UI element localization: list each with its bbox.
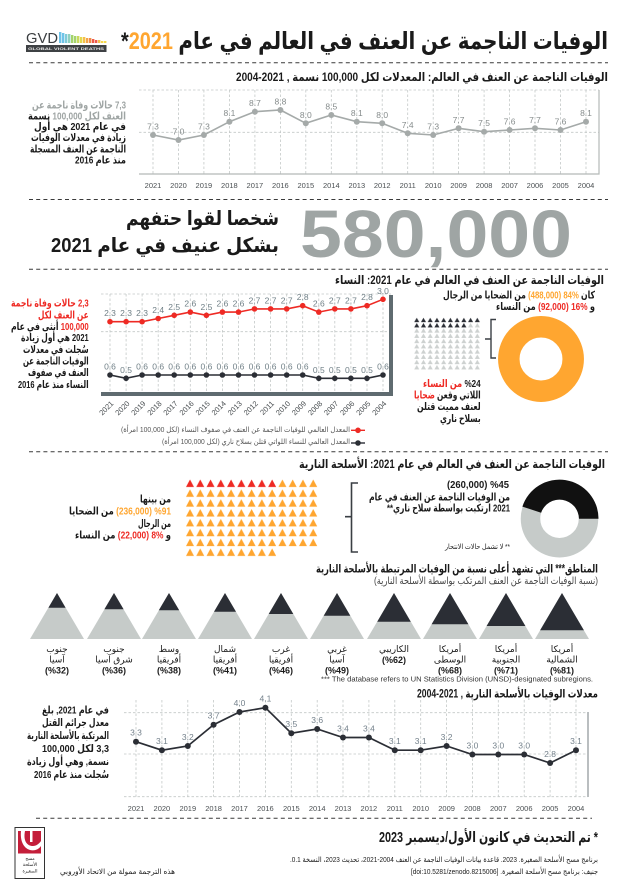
text block: female rate note: 2021 هي أول زيادة (21, 330, 89, 344)
line chart: female rates: 0.5 (345, 365, 357, 375)
text block: global rate note: العنف لكل 100,000 نسمة (28, 110, 126, 122)
logo: Small Arms Survey: الصغيرة (23, 868, 37, 874)
line chart: female rates: 0.6 (184, 362, 196, 372)
text block: global rate note (28, 100, 126, 166)
line chart: female rates: 0.6 (281, 362, 293, 372)
labels: regions: جنوب (46, 644, 68, 654)
source text: برنامج مسح الأسلحة الصغيرة. 2023. قاعدة بيانات الوفيات الناجمة عن العنف 2004-2021، تحديث 2023، النسخة 0.1. (290, 854, 598, 864)
text block: female firearm share: اللاتي وقعن ضحايا (414, 390, 481, 402)
text block: female rate note (11, 298, 89, 391)
line chart: female rates: 0.6 (152, 362, 164, 372)
line chart: female rates: 2.6 (313, 299, 325, 309)
line chart: female rates: 3.0 (377, 286, 389, 296)
line chart: firearm rates: 4.1 (259, 694, 272, 704)
line chart: female rates: 0.6 (136, 362, 148, 372)
line chart: global violent death rate (139, 90, 599, 190)
line chart: global violent death rate: 2013 (348, 181, 365, 190)
labels: regions: (%41) (213, 666, 237, 676)
text block: male and female victim share: كان %84 (488,000) من الضحايا من الرجال (443, 290, 596, 302)
text block: female rate note: سُجلت في معدلات (23, 344, 89, 356)
text block: firearm rate note: 3,3 لكل 100,000 (42, 743, 109, 755)
line chart: firearm rates: 3.1 (389, 736, 401, 746)
labels: regions: آسيا (49, 654, 65, 664)
line chart: firearm rates: 3.5 (285, 719, 297, 729)
text block: female firearm share (414, 378, 481, 425)
line chart: firearm rates: 3.4 (337, 724, 349, 734)
line chart: firearm rates: 2020 (154, 804, 170, 813)
line chart: firearm rates: 3.1 (570, 736, 582, 746)
line chart: female rates: 2018 (145, 399, 164, 417)
source text: جنيف: برنامج مسح الأسلحة الصغيرة. [doi:10.5281/zenodo.8215006] (411, 866, 598, 876)
line chart: female rates: 2.6 (216, 299, 229, 309)
labels: regions: الكاريبي (379, 644, 409, 654)
line chart: female rates: 2014 (210, 399, 228, 417)
line chart: female rates: 2017 (161, 399, 180, 417)
labels: regions: (%49) (325, 666, 349, 676)
line chart: firearm rates: 2010 (412, 804, 429, 813)
line chart: firearm rates: 2005 (542, 804, 558, 813)
line chart: firearm rates: 3.0 (466, 740, 479, 750)
line chart: firearm rates: 2018 (205, 804, 222, 813)
text block: firearm share (369, 479, 510, 514)
labels: regions: غرب (272, 644, 290, 654)
big number: 580,000: 580,000 (300, 197, 572, 272)
line chart: global violent death rate: 7.3 (427, 122, 439, 132)
text block: global rate note: زيادة في معدلات الوفيات (31, 132, 126, 144)
line chart: female rates: 2006 (338, 399, 356, 417)
text block: female rate note: عن العنف لكل (38, 310, 89, 322)
line chart: global violent death rate: 2007 (501, 181, 518, 190)
text block: male and female victim share (443, 290, 596, 313)
line chart: female rates (97, 286, 391, 417)
line chart: female rates: 2.7 (265, 295, 277, 305)
labels: regions: غربي (327, 644, 347, 654)
line chart: global violent death rate: 2014 (323, 181, 340, 190)
line chart: female rates: 0.6 (216, 362, 229, 372)
line chart: female rates: 2.8 (361, 292, 373, 302)
labels: regions: (%36) (102, 666, 126, 676)
line chart: female rates: 2020 (113, 399, 132, 417)
line chart: global violent death rate: 8.1 (580, 108, 592, 118)
labels: regions: (%68) (438, 666, 462, 676)
line chart: firearm rates: 3.6 (311, 715, 323, 725)
line chart: female rates: 2004 (370, 399, 388, 417)
legend: female rates (121, 424, 365, 446)
line chart: global violent death rate: 8.1 (223, 108, 236, 118)
line chart: female rates: 2012 (242, 399, 260, 417)
donut chart: firearm share (522, 480, 599, 548)
line chart: global violent death rate: 2009 (450, 181, 467, 190)
line chart: firearm rates: 2009 (438, 804, 455, 813)
bracket: firearms (345, 483, 358, 552)
logo: GVD Global Violent Deaths: GLOBAL VIOLENT DEATHS (28, 46, 104, 51)
line chart: female rates: 2010 (274, 399, 292, 417)
legend: female rates: المعدل العالمي للنساء اللواتي قتلن بسلاح ناري (لكل 100,000 امرأة) (162, 436, 350, 446)
line chart: female rates: 2019 (129, 399, 148, 417)
labels: regions: (%81) (550, 666, 574, 676)
labels: regions: أمريكا (551, 643, 573, 654)
line chart: global violent death rate: 8.5 (325, 102, 337, 112)
line chart: global violent death rate: 7.6 (504, 116, 516, 126)
line chart: firearm rates: 2006 (516, 804, 533, 813)
line chart: female rates: 2.6 (184, 299, 196, 309)
line chart: global violent death rate: 2020 (170, 181, 187, 190)
line chart: female rates: 0.5 (120, 365, 132, 375)
line chart: female rates: 0.5 (361, 365, 373, 375)
line chart: global violent death rate: 2008 (476, 181, 492, 190)
line chart: firearm rates: 3.0 (518, 740, 530, 750)
line chart: global violent death rate: 8.8 (274, 96, 287, 106)
line chart: global violent death rate: 7.7 (453, 115, 465, 125)
line chart: global violent death rate: 7.5 (478, 118, 490, 128)
source text (290, 854, 598, 876)
line chart: global violent death rate: 2005 (552, 181, 569, 190)
labels: regions: أمريكا (439, 643, 461, 654)
line chart: global violent death rate: 2004 (578, 181, 594, 190)
text block: female firearm share: لعنف مميت قتلن (417, 401, 481, 413)
line chart: female rates: 2016 (178, 399, 196, 417)
line chart: female rates: 2.7 (281, 295, 293, 305)
line chart: global violent death rate: 7.0 (173, 126, 185, 136)
labels: regions: الشمالية (546, 654, 578, 664)
line chart: female rates: 2013 (226, 399, 244, 417)
donut chart: male and female victims (509, 327, 573, 391)
line chart: global violent death rate: 2021 (145, 181, 161, 190)
pictogram: women killed with firearms (413, 317, 481, 370)
logo: Small Arms Survey: مسح (25, 856, 35, 861)
line chart: firearm rates: 2015 (283, 804, 300, 813)
logo: GVD Global Violent Deaths (26, 30, 106, 52)
logo: Small Arms Survey: الأسلحة (23, 861, 37, 867)
text block: firearm share: من الوفيات الناجمة عن العنف في عام (369, 492, 510, 504)
labels: regions: آسيا (329, 654, 345, 664)
line chart: female rates: 2.7 (345, 295, 357, 305)
text block: firearm rate note: سُجلت منذ عام 2016 (34, 769, 109, 781)
line chart: global violent death rate: 7.3 (147, 122, 159, 132)
text block: female rate note: 100,000 أنثى في عام (11, 319, 89, 333)
text block: female rate note: 2,3 حالات وفاة ناجمة (11, 298, 89, 310)
labels: regions: (%71) (494, 666, 518, 676)
labels: regions: (%32) (45, 666, 69, 676)
line chart: global violent death rate: 2010 (425, 181, 442, 190)
line chart: female rates: 2021 (97, 399, 115, 417)
text block: female firearm share: %24 من النساء (423, 378, 481, 390)
line chart: global violent death rate: 2017 (247, 181, 263, 190)
line chart: firearm rates: 2008 (464, 804, 481, 813)
labels: regions: الوسطى (434, 654, 466, 664)
line chart: global violent death rate: 8.7 (249, 98, 261, 108)
line chart: firearm rates: 3.0 (492, 740, 504, 750)
line chart: female rates: 2015 (194, 399, 212, 417)
bracket: women (485, 320, 496, 358)
legend: female rates: المعدل العالمي للوفيات الناجمة عن العنف في صفوف النساء (لكل 100,000 امرأة) (121, 424, 350, 434)
labels: regions: (%38) (157, 666, 181, 676)
line chart: female rates: 2.3 (136, 308, 148, 318)
line chart: female rates: 0.5 (329, 365, 341, 375)
line chart: firearm rates: 2004 (568, 804, 584, 813)
labels: regions: وسط (159, 644, 179, 654)
text block: firearm victims by sex: من بينها (140, 494, 171, 506)
labels: regions: شمال (214, 644, 236, 654)
logo: GVD Global Violent Deaths: GVD (26, 30, 58, 47)
text block: firearm victims by sex (69, 494, 171, 542)
logo: Small Arms Survey (15, 828, 44, 878)
line chart: female rates: 2011 (258, 399, 276, 417)
text block: female rate note: النساء منذ عام 2016 (18, 379, 89, 391)
labels: regions: أفريقيا (213, 654, 237, 664)
footnote: UNSD subregions: *** The database refers to UN Statistics Division (UNSD)-designated subregions. (321, 676, 593, 684)
line chart: global violent death rate: 2015 (297, 181, 314, 190)
line chart: female rates: 0.6 (168, 362, 180, 372)
labels: regions: الجنوبية (492, 654, 520, 664)
line chart: firearm rates: 3.2 (182, 732, 194, 742)
text block: firearm rate note: نسمة, وهي أول زيادة (27, 754, 109, 768)
line chart: female rates: 0.6 (297, 362, 309, 372)
line chart: firearm rates: 2016 (257, 804, 274, 813)
labels: regions: أفريقيا (269, 654, 293, 664)
line chart: female rates: 2.5 (168, 302, 180, 312)
labels: regions: شرق آسيا (95, 654, 133, 664)
line chart: global violent death rate: 7.7 (529, 115, 541, 125)
text block: firearm share: 2021 ارتكبت بواسطة سلاح ناري** (387, 502, 510, 514)
labels: regions: جنوب (103, 644, 125, 654)
line chart: firearm rates (124, 694, 588, 813)
line chart: firearm rates: 2017 (231, 804, 248, 813)
line chart: global violent death rate: 7.6 (555, 116, 567, 126)
line chart: female rates: 0.6 (377, 362, 389, 372)
text block: global rate note: في عام 2021 هي أول (34, 119, 126, 133)
line chart: global violent death rate: 2011 (400, 181, 416, 190)
line chart: female rates: 0.6 (233, 362, 245, 372)
labels: regions: (%46) (269, 666, 293, 676)
line chart: firearm rates: 3.7 (208, 711, 220, 721)
line chart: firearm rates: 3.2 (441, 732, 453, 742)
line chart: firearm rates: 3.3 (130, 728, 142, 738)
line chart: female rates: 0.6 (104, 362, 116, 372)
text block: global rate note: منذ عام 2016 (75, 154, 126, 166)
line chart: female rates: 2.3 (120, 308, 132, 318)
line chart: firearm rates: 2013 (335, 804, 351, 813)
text block: firearm share: %45 (260,000) (447, 479, 509, 491)
line chart: female rates: 2.7 (249, 295, 261, 305)
line chart: firearm rates: 2021 (128, 804, 144, 813)
text block: firearm victims by sex: و %8 (22,000) من النساء (75, 530, 171, 542)
text block: female rate note: العنف في صفوف (28, 367, 89, 379)
line chart: female rates: 2.5 (200, 302, 213, 312)
text block: female firearm share: بسلاح ناري (440, 413, 481, 425)
text block: global rate note: 7,3 حالات وفاة ناجمة عن (32, 100, 126, 112)
text block: firearm rate note: في عام 2021, بلغ (42, 704, 109, 716)
line chart: firearm rates: 3.1 (415, 736, 427, 746)
line chart: female rates: 2007 (322, 399, 340, 417)
line chart: firearm rates: 3.1 (156, 736, 168, 746)
line chart: global violent death rate: 2012 (374, 181, 391, 190)
labels: regions: أمريكا (495, 643, 517, 654)
text block: global rate note: الناجمة عن العنف المسجلة (30, 144, 126, 156)
text block: firearm victims by sex: من الرجال (138, 518, 171, 530)
line chart: female rates: 2.7 (329, 295, 341, 305)
line chart: female rates: 2.6 (233, 299, 245, 309)
line chart: global violent death rate: 2006 (527, 181, 543, 190)
line chart: female rates: 0.6 (200, 362, 213, 372)
text block: male and female victim share: و %16 (92,000) من النساء (496, 301, 595, 313)
line chart: female rates: 2.4 (152, 305, 164, 315)
line chart: female rates: 2008 (306, 399, 324, 417)
labels: regions: أفريقيا (157, 654, 181, 664)
line chart: firearm rates: 2011 (387, 804, 403, 813)
line chart: global violent death rate: 2019 (196, 181, 212, 190)
line chart: firearm rates: 4.0 (234, 698, 246, 708)
text block: firearm rate note: معدل جرائم القتل (42, 717, 109, 729)
labels: regions: (%62) (382, 655, 406, 665)
line chart: global violent death rate: 2018 (221, 181, 238, 190)
text block: people died violently: بشكل عنيف في عام 2021 (51, 235, 279, 258)
triangle pictogram: firearm victims by sex (185, 478, 319, 557)
mountain chart: regional firearm shares (30, 593, 589, 639)
line chart: female rates: 2.3 (104, 308, 116, 318)
line chart: female rates: 0.6 (249, 362, 261, 372)
line chart: female rates: 0.6 (265, 362, 277, 372)
line chart: global violent death rate: 2016 (272, 181, 289, 190)
text block: people died violently: شخصا لقوا حتفهم (126, 208, 279, 230)
line chart: firearm rates: 2014 (309, 804, 326, 813)
line chart: firearm rates: 3.4 (363, 724, 375, 734)
line chart: female rates: 2.8 (297, 292, 309, 302)
text block: firearm victims by sex: %91 (236,000) من الضحايا (69, 506, 171, 518)
text block: firearm rate note (27, 704, 109, 781)
line chart: firearm rates: 2.8 (544, 749, 556, 759)
line chart: global violent death rate: 8.0 (376, 110, 388, 120)
line chart: firearm rates: 2012 (361, 804, 377, 813)
funding note: هذه الترجمة ممولة من الاتحاد الأوروبي (60, 866, 175, 876)
line chart: female rates: 0.5 (313, 365, 325, 375)
labels: regions (45, 643, 578, 676)
footnote: suicide excluded: ** لا تشمل حالات الانتحار (444, 544, 510, 551)
text block: female rate note: الوفيات الناجمة عن (23, 356, 89, 368)
line chart: firearm rates: 2007 (490, 804, 507, 813)
text block: firearm rate note: المرتكبة بالأسلحة النارية (27, 729, 109, 742)
line chart: female rates: 2005 (354, 399, 372, 417)
text block: people died violently (51, 208, 279, 258)
line chart: firearm rates: 2019 (179, 804, 196, 813)
line chart: global violent death rate: 7.3 (198, 122, 210, 132)
line chart: global violent death rate: 8.0 (300, 110, 312, 120)
line chart: global violent death rate: 8.1 (351, 108, 363, 118)
line chart: global violent death rate: 7.4 (402, 120, 414, 130)
line chart: female rates: 2009 (290, 399, 308, 417)
